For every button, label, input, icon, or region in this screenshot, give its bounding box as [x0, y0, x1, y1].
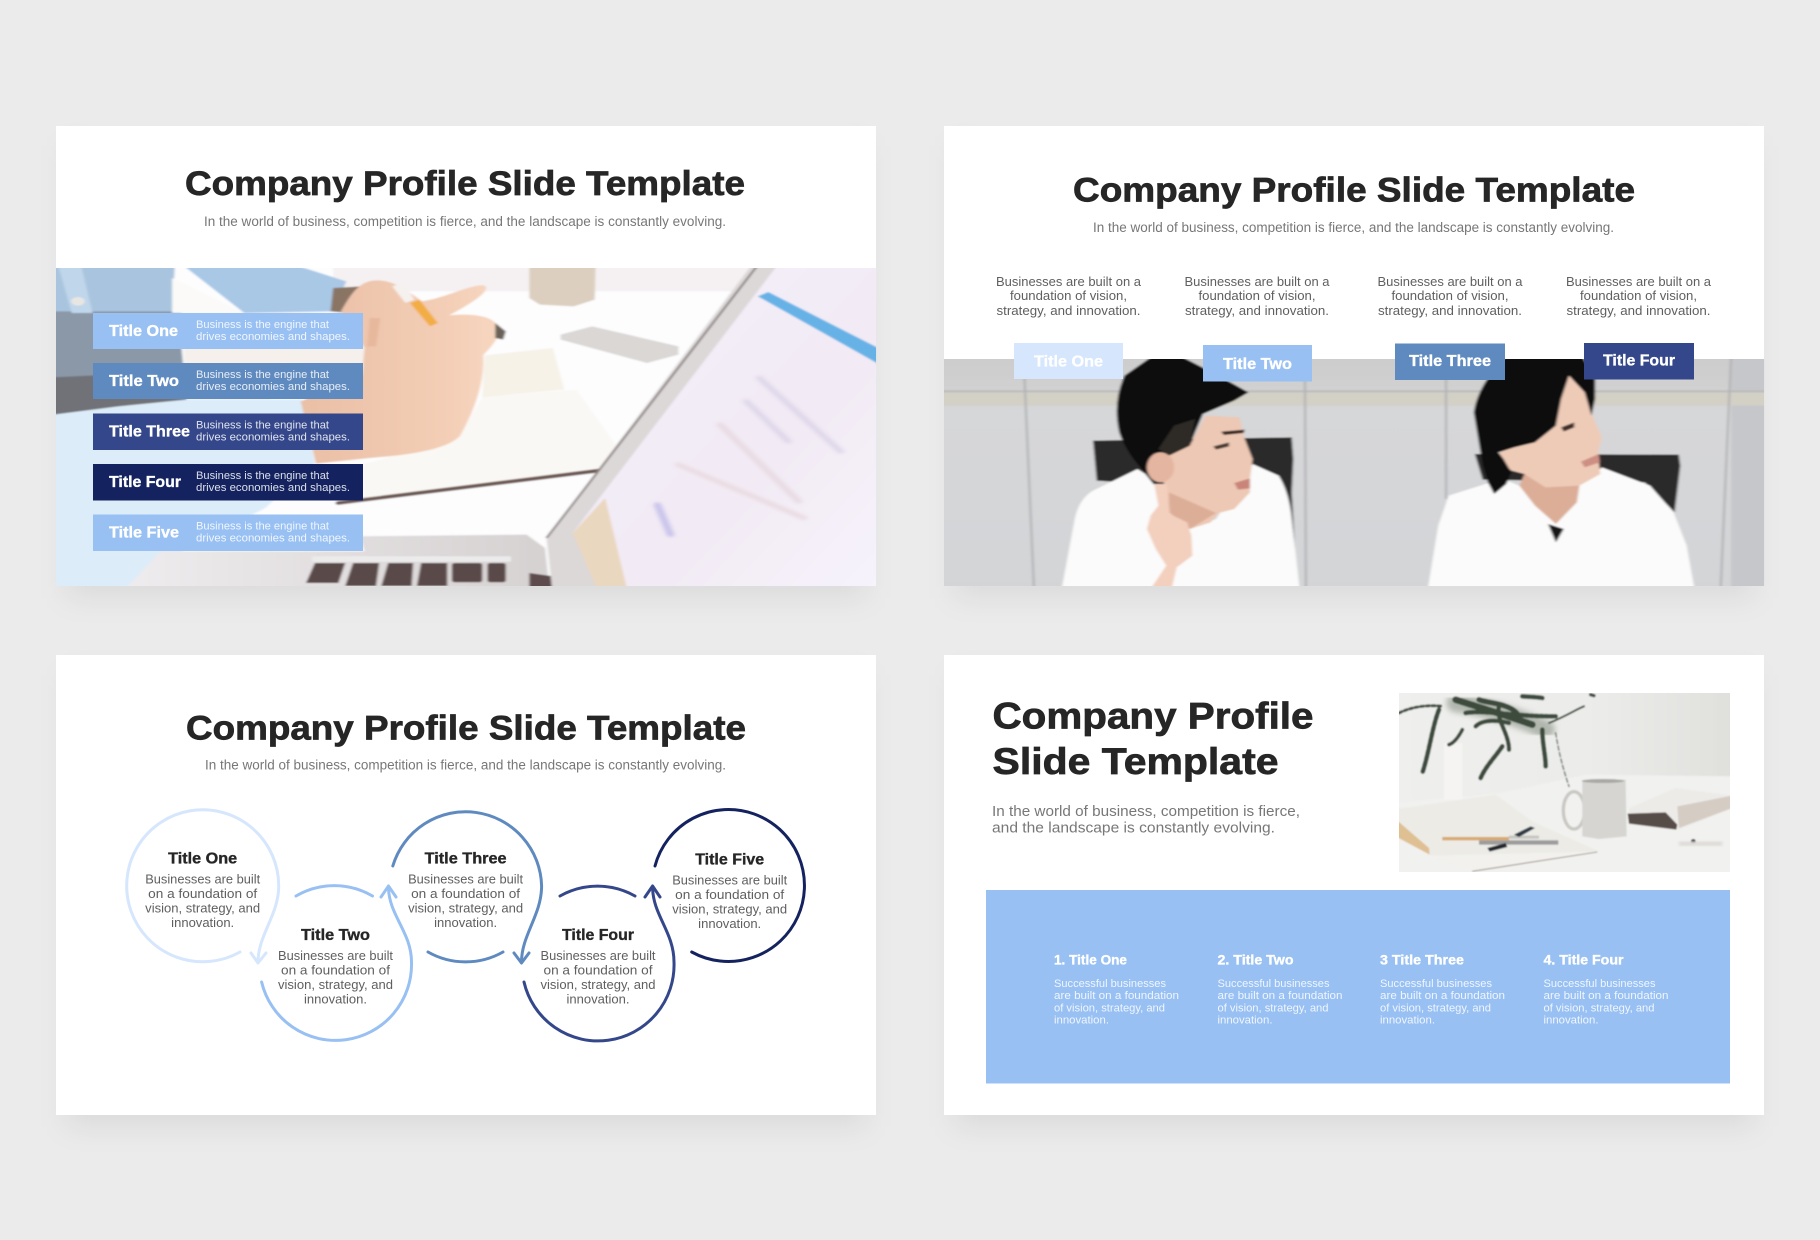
circle text: Title Five: on a foundation of: [675, 887, 785, 902]
column: 4. Title Four: Successful businesses: [1544, 978, 1656, 990]
heading: Slide Template: [992, 741, 1278, 782]
circle text: Title Four: [540, 927, 656, 1006]
circle text: Title One: [145, 850, 261, 930]
subtitle: In the world of business, competition is fierce, and the landscape is constantly evolving.: [205, 758, 726, 772]
circle text: Title Four: on a foundation of: [544, 962, 653, 978]
label box: Title Two: [1203, 345, 1312, 382]
column text three: strategy, and innovation.: [1378, 303, 1522, 318]
column: 3 Title Three: 3 Title Three: [1380, 952, 1464, 968]
card shadow: [66, 146, 866, 598]
heading: Company Profile Slide Template: [1073, 172, 1635, 210]
circle text: Title Three: innovation.: [434, 915, 497, 930]
list row: Title Five: Business is the engine that: [196, 520, 329, 532]
label box: Title One: Title One: [1034, 354, 1103, 370]
column text four: [1566, 274, 1712, 318]
column: 3 Title Three: Successful businesses: [1380, 978, 1493, 990]
circle text: Title Two: [278, 927, 393, 1006]
circle text: Title One: on a foundation of: [148, 886, 258, 901]
heading: Company Profile Slide Template: [185, 165, 745, 203]
column: 4. Title Four: innovation.: [1544, 1014, 1598, 1026]
subtitle: In the world of business, competition is fierce, and the landscape is constantly evolving.: [204, 214, 726, 229]
circle text: Title One: innovation.: [171, 915, 234, 930]
card background: [944, 126, 1764, 586]
card shadow: [66, 675, 866, 1127]
label box: Title One: [1014, 343, 1123, 379]
circle text: Title Three: Businesses are built: [408, 872, 523, 886]
list row: Title Five: drives economies and shapes.: [196, 532, 350, 544]
column: 3 Title Three: innovation.: [1380, 1014, 1435, 1026]
circle text: Title Two: vision, strategy, and: [278, 977, 393, 992]
intro text: [992, 803, 1300, 836]
list row: Title Two: [93, 363, 363, 399]
heading: [992, 696, 1314, 782]
column text four: Businesses are built on a: [1566, 274, 1712, 289]
intro text: In the world of business, competition is fierce,: [992, 803, 1300, 820]
circle text: Title Four: vision, strategy, and: [540, 977, 656, 992]
list row: Title Three: [93, 414, 363, 450]
column: 1. Title One: Successful businesses: [1054, 978, 1167, 990]
circle arrow three: [393, 812, 542, 963]
circle text: Title Five: [672, 852, 788, 931]
list row: Title Four: Title Four: [109, 474, 181, 491]
column: 2. Title Two: of vision, strategy, and: [1218, 1002, 1328, 1014]
column: 2. Title Two: innovation.: [1218, 1014, 1272, 1026]
column: 4. Title Four: are built on a foundation: [1544, 990, 1668, 1002]
column: 4. Title Four: of vision, strategy, and: [1544, 1002, 1654, 1014]
column text one: Businesses are built on a: [996, 274, 1142, 289]
list row: Title Two: Title Two: [109, 373, 179, 390]
list row: Title Two: Business is the engine that: [196, 369, 329, 381]
circle text: Title Five: Title Five: [695, 852, 764, 868]
circle text: Title Two: innovation.: [304, 992, 367, 1006]
circle text: Title One: Businesses are built: [145, 872, 261, 886]
column: 3 Title Three: are built on a foundation: [1380, 990, 1505, 1002]
column text four: foundation of vision,: [1580, 288, 1697, 303]
card background: [944, 655, 1764, 1115]
circle text: Title Five: vision, strategy, and: [672, 902, 787, 916]
column text one: strategy, and innovation.: [996, 303, 1140, 318]
circle text: Title Three: on a foundation of: [411, 886, 521, 901]
circle text: Title Two: Title Two: [301, 927, 370, 944]
intro text: and the landscape is constantly evolving.: [992, 820, 1275, 836]
list row: Title Four: [93, 464, 363, 500]
column: 2. Title Two: 2. Title Two: [1218, 952, 1294, 968]
circle text: Title Five: innovation.: [698, 916, 761, 931]
label box: Title Three: [1395, 344, 1505, 380]
circle text: Title Five: Businesses are built: [672, 872, 788, 888]
circle text: Title One: Title One: [168, 850, 237, 868]
column: 4. Title Four: 4. Title Four: [1544, 952, 1624, 968]
column text one: [996, 274, 1142, 318]
column: 3 Title Three: [1380, 952, 1505, 1026]
circle arrow two: [262, 886, 412, 1040]
circle text: Title Four: Title Four: [562, 927, 634, 944]
list row: Title One: drives economies and shapes.: [196, 331, 350, 343]
circle text: Title One: vision, strategy, and: [145, 900, 260, 916]
panel: slide two, four columns over photo: [928, 126, 1781, 598]
blue band: [986, 890, 1730, 1084]
card shadow: [954, 146, 1754, 598]
column: 3 Title Three: of vision, strategy, and: [1380, 1002, 1491, 1014]
card background: [56, 655, 876, 1115]
list row: Title Five: Title Five: [109, 524, 179, 542]
subtitle: In the world of business, competition is fierce, and the landscape is constantly evolving.: [1093, 220, 1614, 235]
circle text: Title Three: vision, strategy, and: [408, 900, 523, 916]
photo: mug, notebook and plant on desk: [1399, 693, 1730, 872]
circle text: Title Two: on a foundation of: [281, 962, 390, 978]
circle arrow one: [127, 810, 279, 963]
circle text: Title Three: Title Three: [425, 850, 507, 868]
list row: Title One: Title One: [109, 323, 178, 340]
column text three: Businesses are built on a: [1378, 274, 1523, 289]
column: 1. Title One: [1054, 952, 1179, 1026]
list row: Title Four: drives economies and shapes.: [196, 482, 350, 494]
card shadow: [954, 675, 1754, 1127]
list row: Title Three: drives economies and shapes.: [196, 432, 350, 444]
column text three: foundation of vision,: [1392, 288, 1508, 303]
column: 1. Title One: are built on a foundation: [1054, 990, 1179, 1002]
column text two: strategy, and innovation.: [1185, 303, 1329, 318]
label box: Title Four: [1584, 343, 1694, 380]
panel: slide three, linked circles: [56, 655, 876, 1127]
column: 1. Title One: innovation.: [1054, 1014, 1109, 1026]
circle text: Title Four: Businesses are built: [540, 948, 656, 963]
panel: slide four, photo and blue band: [944, 655, 1764, 1127]
label box: Title Two: Title Two: [1223, 356, 1292, 373]
circle arrow four: [524, 886, 674, 1041]
column: 2. Title Two: [1218, 952, 1342, 1026]
column text two: [1184, 274, 1330, 318]
circle text: Title Two: Businesses are built: [278, 948, 393, 963]
list row: Title One: [93, 313, 363, 349]
list row: Title Two: drives economies and shapes.: [196, 381, 350, 393]
list row: Title One: Business is the engine that: [196, 319, 329, 331]
circle text: Title Four: innovation.: [566, 992, 630, 1006]
label box: Title Three: Title Three: [1409, 353, 1491, 370]
list row: Title Three: Business is the engine that: [196, 420, 329, 432]
column: 1. Title One: 1. Title One: [1054, 952, 1127, 968]
column text two: foundation of vision,: [1198, 288, 1316, 303]
column: 1. Title One: of vision, strategy, and: [1054, 1002, 1165, 1014]
column: 2. Title Two: are built on a foundation: [1218, 990, 1342, 1002]
panel: slide one, list over photo: [40, 126, 893, 598]
column: 4. Title Four: [1544, 952, 1668, 1026]
column text two: Businesses are built on a: [1184, 274, 1330, 289]
list row: Title Four: Business is the engine that: [196, 470, 329, 482]
circle text: Title Three: [408, 850, 523, 930]
circle five: [655, 809, 804, 961]
photo: two men in white shirts: [944, 359, 1764, 586]
photo: hand writing beside laptop: [40, 258, 893, 596]
heading: Company Profile Slide Template: [186, 710, 746, 748]
card background: [56, 126, 876, 586]
heading: Company Profile: [992, 696, 1314, 736]
column text one: foundation of vision,: [1010, 288, 1127, 303]
label box: Title Four: Title Four: [1603, 352, 1675, 370]
column text four: strategy, and innovation.: [1566, 303, 1710, 318]
list row: Title Three: Title Three: [109, 424, 190, 440]
column text three: [1378, 274, 1523, 318]
list row: Title Five: [93, 514, 363, 551]
column: 2. Title Two: Successful businesses: [1218, 978, 1330, 990]
